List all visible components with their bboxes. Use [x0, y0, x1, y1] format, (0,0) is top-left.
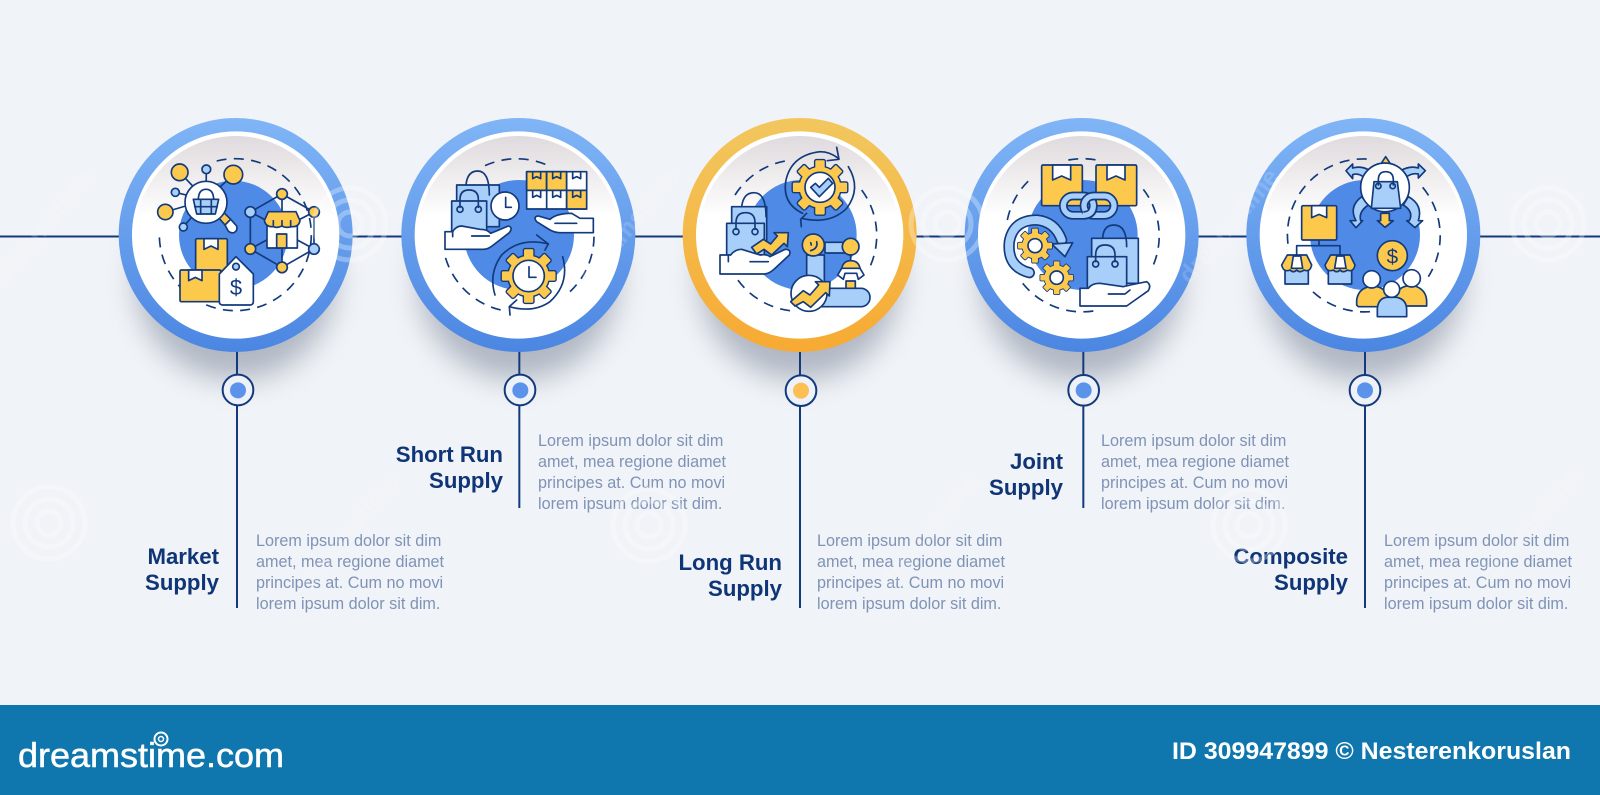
icon: bags, growth arrow, gear and robot arm [720, 147, 870, 311]
icon: distribution, stores, coin and people: $ [1387, 245, 1399, 268]
footer logo: dreamstime.com [18, 737, 284, 775]
text: Joint Supply body: Lorem ipsum dolor sit dim [1101, 432, 1286, 450]
text: Joint Supply body: amet, mea regione diamet [1101, 453, 1290, 471]
watermark text: dreamstime [573, 163, 685, 289]
footer band [0, 705, 1600, 795]
panel: Long Run Supply [683, 118, 917, 608]
text: Short Run Supply heading: Short Run [396, 442, 503, 467]
text: Composite Supply heading: Composite [1233, 544, 1348, 569]
watermark text: dreamstime [1473, 463, 1585, 589]
text: Short Run Supply body: amet, mea regione diamet [538, 453, 727, 471]
text: Short Run Supply body: Lorem ipsum dolor sit dim [538, 432, 723, 450]
text: Composite Supply body: Lorem ipsum dolor sit dim [1384, 532, 1569, 550]
text: Composite Supply body: amet, mea regione diamet [1384, 553, 1573, 571]
text: Market Supply heading: Supply [145, 570, 220, 595]
text: Joint Supply body: lorem ipsum dolor sit dim. [1101, 495, 1285, 513]
text: Market Supply heading: Market [147, 544, 220, 569]
footer credit: ID 309947899 © Nesterenkoruslan [1172, 738, 1571, 765]
watermark text: dreamstime [1173, 163, 1285, 289]
text: Long Run Supply body: Lorem ipsum dolor sit dim [817, 532, 1002, 550]
panel: Short Run Supply [401, 118, 635, 508]
text: Joint Supply heading: Joint [1010, 449, 1064, 474]
text: Market Supply body: amet, mea regione diamet [256, 553, 445, 571]
node [505, 375, 535, 405]
text: Short Run Supply heading: Supply [429, 468, 504, 493]
panel: Market Supply [119, 118, 353, 608]
icon: linked boxes, gears, bags and hand [1009, 165, 1150, 306]
text: Composite Supply body: principes at. Cum no movi [1384, 574, 1571, 592]
panel: Joint Supply [965, 118, 1199, 508]
text: Short Run Supply body: principes at. Cum no movi [538, 474, 725, 492]
text: Market Supply body: principes at. Cum no movi [256, 574, 443, 592]
text: Short Run Supply body: lorem ipsum dolor sit dim. [538, 495, 722, 513]
icon: market search and store network: $ [230, 275, 242, 300]
text: Joint Supply heading: Supply [989, 475, 1064, 500]
node [1350, 375, 1380, 406]
text: Composite Supply heading: Supply [1274, 570, 1349, 595]
node [1068, 375, 1099, 406]
text: Long Run Supply body: amet, mea regione diamet [817, 553, 1006, 571]
node [786, 375, 816, 406]
icon: market search and store network [158, 164, 319, 305]
text: Long Run Supply body: principes at. Cum no movi [817, 574, 1004, 592]
horizontal timeline line [0, 236, 1600, 238]
text: Long Run Supply body: lorem ipsum dolor sit dim. [817, 595, 1001, 613]
text: Market Supply body: lorem ipsum dolor sit dim. [256, 595, 440, 613]
icon: distribution, stores, coin and people [1282, 157, 1427, 317]
watermark text: dreamstime [293, 468, 405, 594]
panel: Composite Supply [1246, 118, 1480, 608]
text: Composite Supply body: lorem ipsum dolor sit dim. [1384, 595, 1568, 613]
text: Long Run Supply heading: Supply [708, 576, 783, 601]
watermark text: dreamstime [873, 468, 985, 594]
text: Market Supply body: Lorem ipsum dolor sit dim [256, 532, 441, 550]
watermark text [0, 163, 1585, 594]
icon: shopping bags, clock, boxes and gear [445, 171, 593, 315]
watermark spirals [13, 188, 1584, 561]
text: Joint Supply body: principes at. Cum no movi [1101, 474, 1288, 492]
node [223, 375, 253, 405]
text: Long Run Supply heading: Long Run [678, 550, 782, 575]
